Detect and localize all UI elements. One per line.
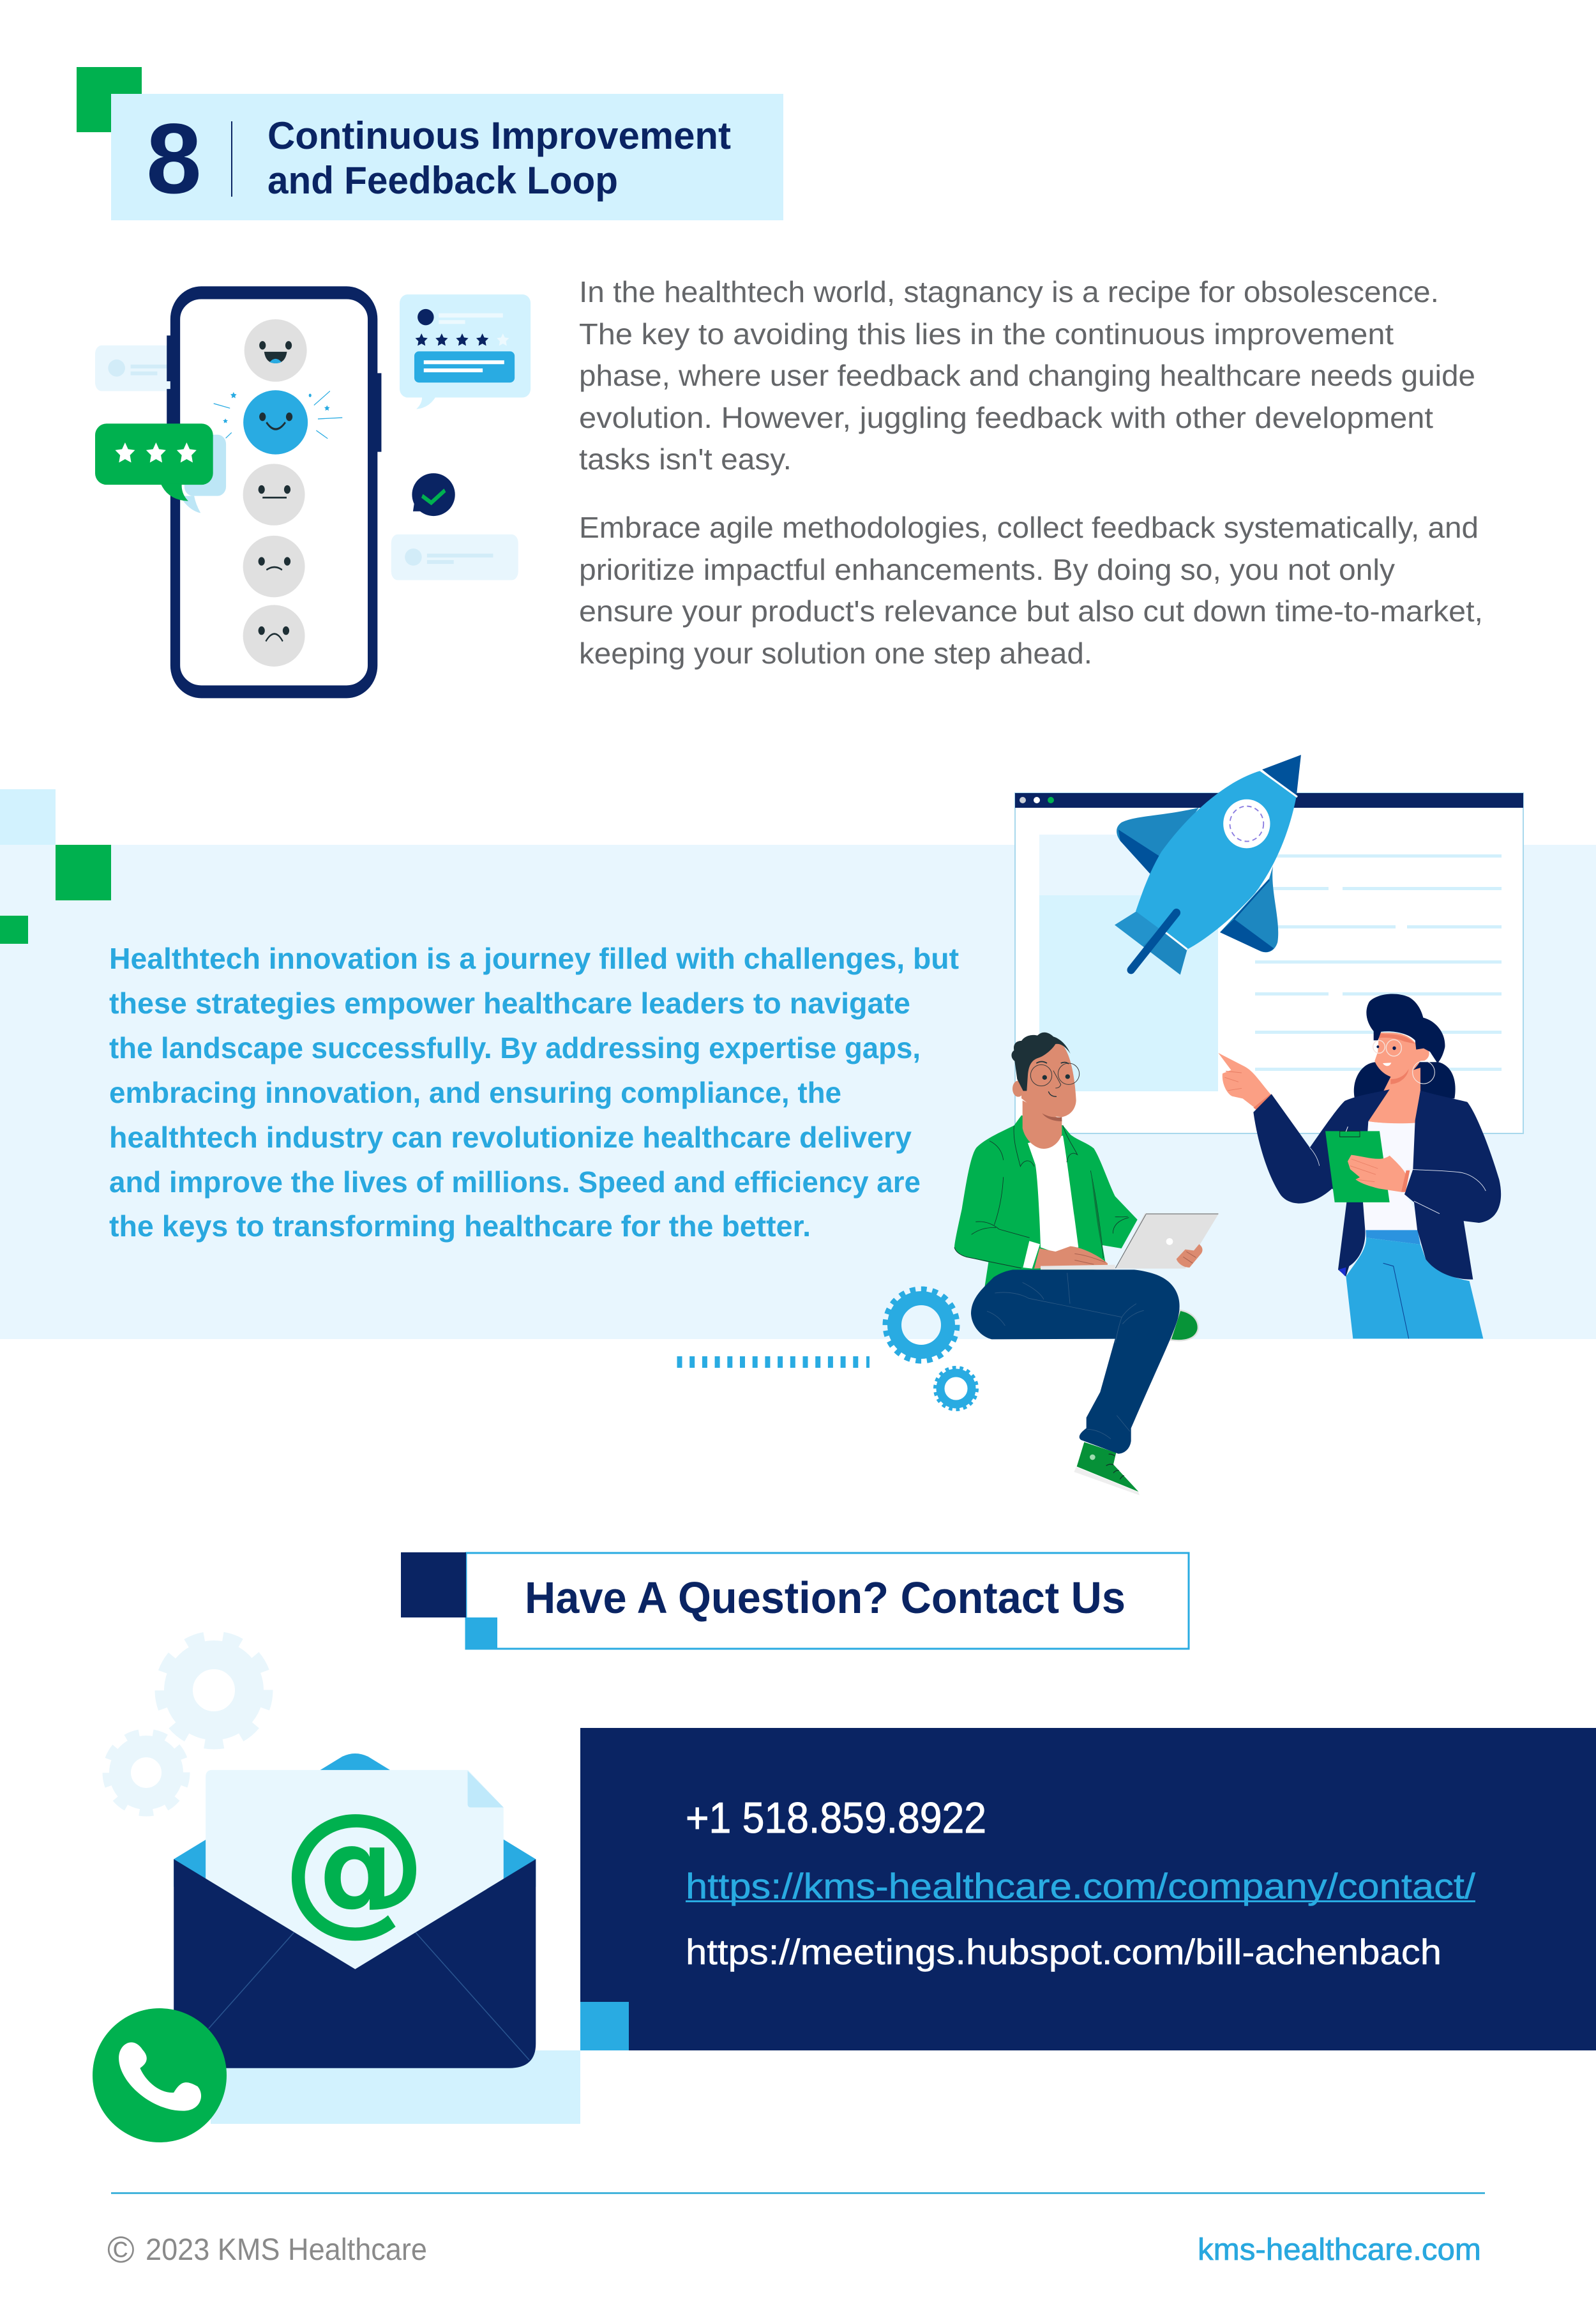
face: neutral: [243, 464, 305, 526]
summary text: the landscape successfully. By addressing expertise gaps,: [109, 1031, 921, 1064]
icon: faded gears: [106, 1636, 268, 1813]
woman hand on clipboard: [1348, 1155, 1410, 1192]
illustration: seated man: [954, 1033, 1219, 1496]
header banner: [111, 94, 783, 220]
heading frame: [466, 1553, 1189, 1649]
header divider: [231, 121, 232, 197]
man head: [1011, 1033, 1080, 1121]
browser window: [1015, 793, 1523, 1133]
icon: phone badge: [93, 2008, 227, 2142]
light base rectangle: [211, 2050, 580, 2124]
decorative squares: [0, 789, 111, 944]
blue corner square: [580, 2002, 629, 2050]
face: very happy: [245, 319, 307, 382]
text block: continuous improvement: [579, 275, 1483, 670]
dashed line: [677, 1356, 870, 1368]
website: kms-healthcare.com: [1198, 2233, 1481, 2267]
woman top: [1363, 1121, 1418, 1230]
faded card left: [95, 345, 173, 391]
face: very unhappy: [243, 605, 305, 667]
illustration: woman with clipboard: [1218, 994, 1501, 1338]
woman neck and chest: [1368, 1068, 1420, 1124]
contact link: https://kms-healthcare.com/company/contact/: [686, 1866, 1475, 1906]
heading: Continuous Improvement: [267, 114, 731, 157]
blue square: [465, 1617, 497, 1649]
summary text: Healthtech innovation is a journey filled with challenges, but: [109, 942, 959, 975]
icon: rocket: [1115, 755, 1301, 975]
summary text: these strategies empower healthcare leaders to navigate: [109, 987, 910, 1020]
icon: blue gears: [885, 1289, 977, 1410]
green corner square: [77, 67, 142, 132]
icon: envelope: [174, 1753, 536, 2068]
at sign: @: [282, 1782, 426, 1950]
light speech bubble: [179, 435, 226, 513]
green rating bubble: [95, 423, 213, 501]
illustration: phone with feedback faces: [95, 292, 531, 692]
woman hair back: [1354, 1062, 1456, 1098]
check badge: [412, 473, 455, 516]
text block: continuous improvement: The key to avoiding this lies in the continuous improvement: [579, 317, 1394, 351]
heading: and Feedback Loop: [267, 159, 618, 202]
text block: continuous improvement: tasks isn't easy.: [579, 443, 792, 476]
woman jacket: [1253, 1089, 1501, 1280]
text block: continuous improvement: ensure your product's relevance but also cut down time-to-market,: [579, 594, 1483, 628]
face: unhappy: [243, 536, 305, 597]
step number: 8: [146, 103, 202, 215]
man torso: [954, 1033, 1219, 1290]
man trousers: [971, 1269, 1180, 1454]
heading: [267, 114, 731, 202]
clipboard: [1325, 1126, 1390, 1202]
summary text: the keys to transforming healthcare for the better.: [109, 1209, 811, 1243]
meeting link: https://meetings.hubspot.com/bill-achenbach: [686, 1932, 1442, 1972]
woman trousers: [1346, 1230, 1483, 1338]
summary text: healthtech industry can revolutionize healthcare delivery: [109, 1121, 912, 1154]
phone side buttons: [167, 335, 381, 452]
text block: continuous improvement: Embrace agile methodologies, collect feedback systematically, and: [579, 511, 1479, 544]
contact title: Have A Question? Contact Us: [525, 1573, 1125, 1623]
text block: continuous improvement: In the healthtech world, stagnancy is a recipe for obsolescence.: [579, 275, 1439, 308]
faded card right: [391, 534, 518, 580]
woman pointing hand: [1218, 1053, 1272, 1110]
phone number: +1 518.859.8922: [686, 1794, 986, 1842]
summary text: [109, 942, 959, 1243]
text block: continuous improvement: prioritize impactful enhancements. By doing so, you not only: [579, 553, 1395, 586]
navy square: [401, 1552, 466, 1617]
phone body: [175, 292, 373, 692]
summary text: embracing innovation, and ensuring compliance, the: [109, 1076, 841, 1109]
text block: continuous improvement: keeping your solution one step ahead.: [579, 637, 1092, 670]
face: happy highlighted: [214, 390, 342, 455]
contact heading: [401, 1552, 1189, 1649]
panel: contact details: [580, 1728, 1596, 2050]
section header: step 8: [77, 67, 783, 220]
woman head: [1366, 994, 1445, 1084]
copyright symbol: ©: [107, 2229, 135, 2271]
summary text: and improve the lives of millions. Speed and efficiency are: [109, 1165, 921, 1199]
review bubble: [400, 294, 531, 409]
text block: continuous improvement: evolution. However, juggling feedback with other development: [579, 401, 1433, 434]
man legs and shoes: [1074, 1310, 1198, 1496]
panel: summary band: [0, 845, 1596, 1339]
copyright: 2023 KMS Healthcare: [146, 2233, 427, 2267]
text block: continuous improvement: phase, where user feedback and changing healthcare needs guide: [579, 359, 1475, 392]
footer: [107, 2192, 1485, 2271]
